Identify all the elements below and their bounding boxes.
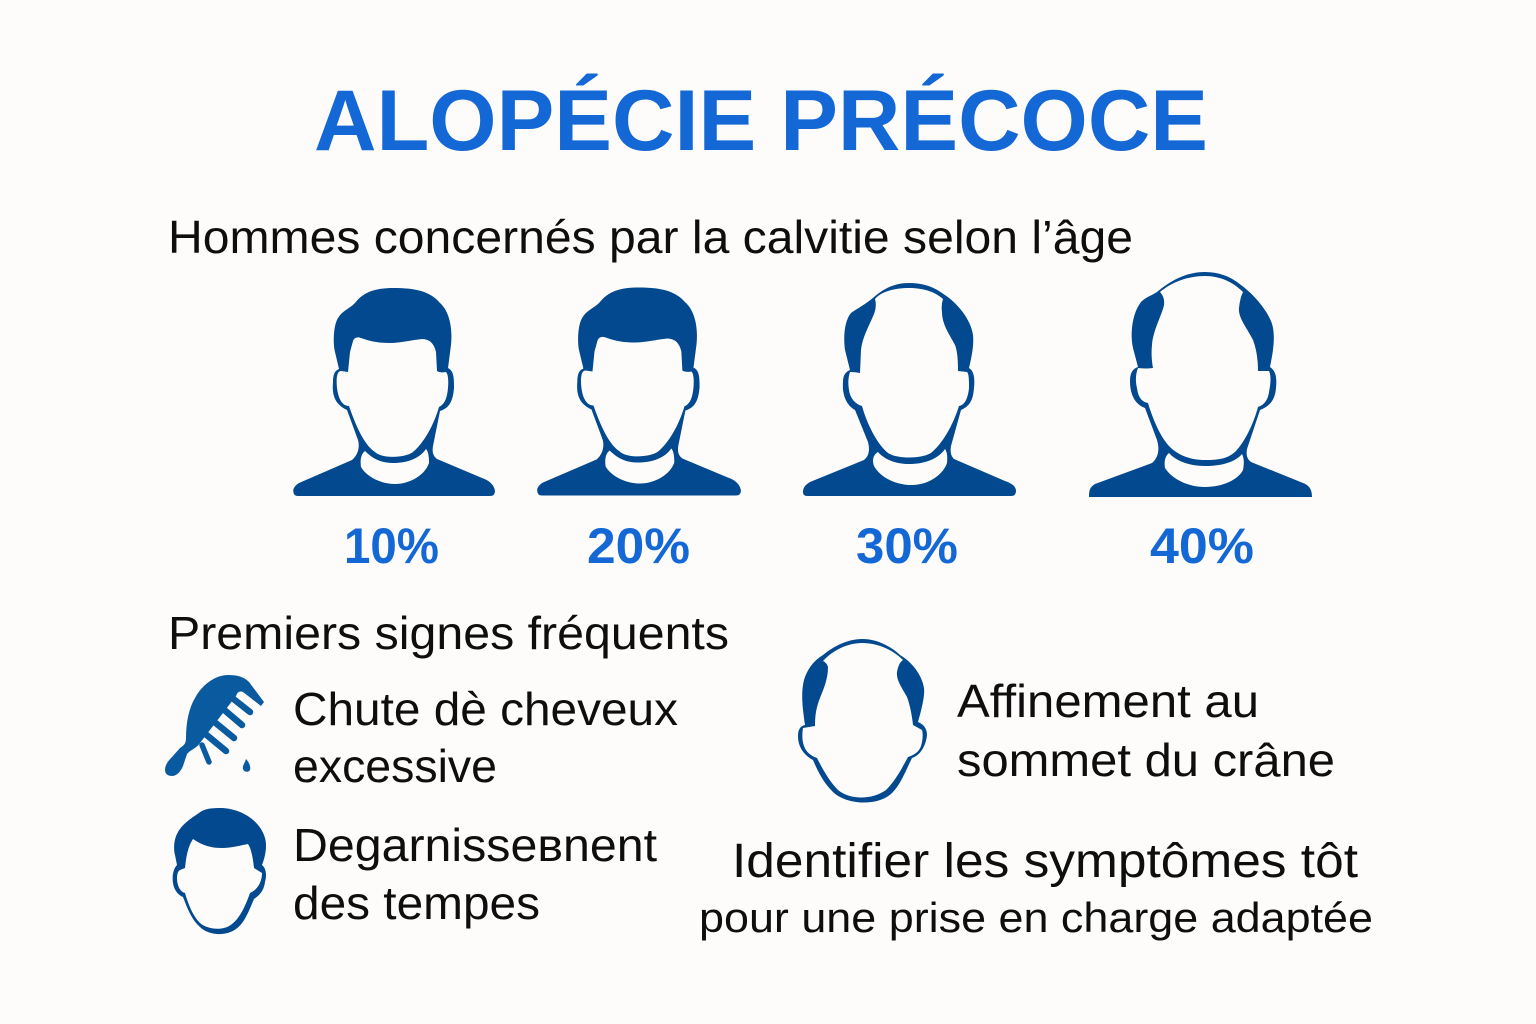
heading: first signs: Premiers signes fréquents (168, 607, 729, 659)
callout: identify symptoms early (699, 835, 1373, 941)
stat: 20%: 20% (587, 518, 690, 574)
label: hair loss (293, 683, 678, 792)
icon: balding head, 40% (1089, 272, 1312, 497)
label: receding temples: des tempes (293, 877, 540, 929)
title: ALOPÉCIE PRÉCOCE (314, 73, 1208, 169)
icon: thinning crown head (798, 639, 927, 803)
label: receding temples (293, 819, 657, 929)
label: crown thinning: sommet du crâne (957, 734, 1335, 786)
label: receding temples: Degarnisseвnent (293, 819, 657, 871)
icon: balding head, 30% (803, 283, 1016, 496)
stat: 30%: 30% (856, 518, 958, 574)
icon: head with full hair, 10% (293, 288, 495, 496)
label: hair loss: Chute dè cheveux (293, 683, 678, 735)
icon: receding temples head (173, 808, 266, 934)
label: hair loss: excessive (293, 740, 497, 792)
callout: identify symptoms early: Identifier les symptômes tôt (732, 835, 1358, 888)
label: crown thinning: Affinement au (957, 675, 1259, 727)
icon: head with full hair, 20% (537, 288, 741, 496)
stat: 40%: 40% (1150, 518, 1254, 574)
callout: identify symptoms early: pour une prise en charge adaptée (699, 894, 1373, 941)
stat: 10%: 10% (344, 518, 439, 574)
label: crown thinning (957, 675, 1335, 786)
heading: men affected by age: Hommes concernés par la calvitie selon l’âge (168, 211, 1133, 263)
icon: comb (165, 675, 264, 776)
